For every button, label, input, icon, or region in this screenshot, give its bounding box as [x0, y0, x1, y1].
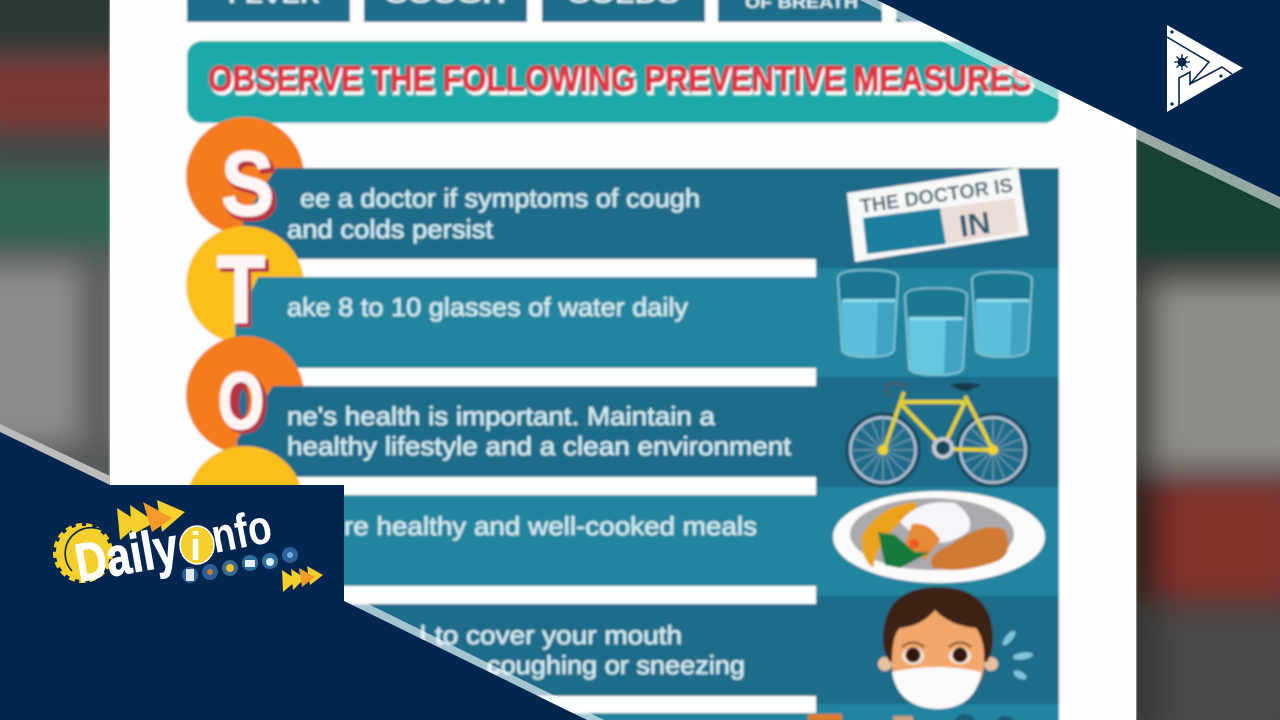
circle: T [186, 226, 304, 344]
icon: the doctor is in sign: THE DOCTOR IS [859, 175, 1014, 218]
icon: bicycle [847, 383, 1029, 486]
icon: the doctor is in sign: IN [957, 205, 993, 244]
letter O: O [221, 359, 268, 448]
row: take water [235, 277, 817, 368]
icon: plate of food [833, 491, 1045, 583]
row text: to cover your mouth [435, 620, 682, 650]
logo sun [56, 526, 110, 580]
navy corner: top right [877, 0, 1280, 197]
heading banner [187, 41, 1059, 123]
row text: l [420, 620, 426, 650]
heading banner: OBSERVE THE FOLLOWING PREVENTIVE MEASURES [210, 61, 1034, 102]
row text: and colds persist [287, 214, 494, 244]
letter T: T [220, 240, 269, 347]
row: cover mouth [262, 604, 817, 696]
logo: PTV triangle [1167, 25, 1243, 112]
logo wordmark end: nfo [207, 500, 276, 564]
heading banner: OBSERVE THE FOLLOWING PREVENTIVE MEASURES [208, 58, 1032, 99]
navy corner: bottom left [0, 432, 587, 720]
row text: ee a doctor if symptoms of cough [300, 183, 700, 213]
row text: coughing or sneezing [487, 650, 745, 680]
row text: re healthy and well-cooked meals [344, 511, 757, 541]
row: one's health [237, 386, 817, 477]
row text [287, 183, 792, 680]
blurred video background: right side [1136, 128, 1280, 720]
bottom row icon fragments [808, 714, 1017, 720]
row: healthy meals [262, 495, 817, 586]
logo wordmark: Daily [71, 517, 183, 594]
logo i badge: i [190, 525, 201, 569]
icon: three water glasses [838, 270, 1032, 375]
circle: S [186, 117, 304, 235]
row: bottom partial [262, 713, 817, 720]
row text: ake 8 to 10 glasses of water daily [287, 292, 688, 322]
logo arrows [117, 500, 185, 540]
grey diagonal strip: top right [860, 0, 1280, 209]
circle: O [186, 336, 304, 454]
logo small arrows [282, 566, 323, 592]
row: see a doctor [243, 168, 817, 259]
letter O: O [218, 356, 264, 445]
grey diagonal strip: bottom left [0, 424, 110, 485]
row text: ne's health is important. Maintain a [287, 401, 716, 431]
symptom boxes [187, 0, 1060, 22]
logo: Daily Info [56, 500, 323, 594]
letter S: S [223, 137, 278, 239]
icon: boy with face mask [878, 587, 1033, 709]
letter S: S [221, 133, 274, 235]
letter T: T [217, 236, 265, 343]
logo i badge [180, 525, 214, 569]
grey diagonal strip: bottom centre [344, 592, 604, 720]
icon: the doctor is in sign [847, 168, 1028, 262]
blurred video background: left side [0, 0, 110, 485]
circle: P [186, 446, 304, 564]
row text: healthy lifestyle and a clean environment [287, 431, 792, 461]
logo small icons [182, 547, 298, 583]
right icon column bands [816, 168, 1059, 720]
